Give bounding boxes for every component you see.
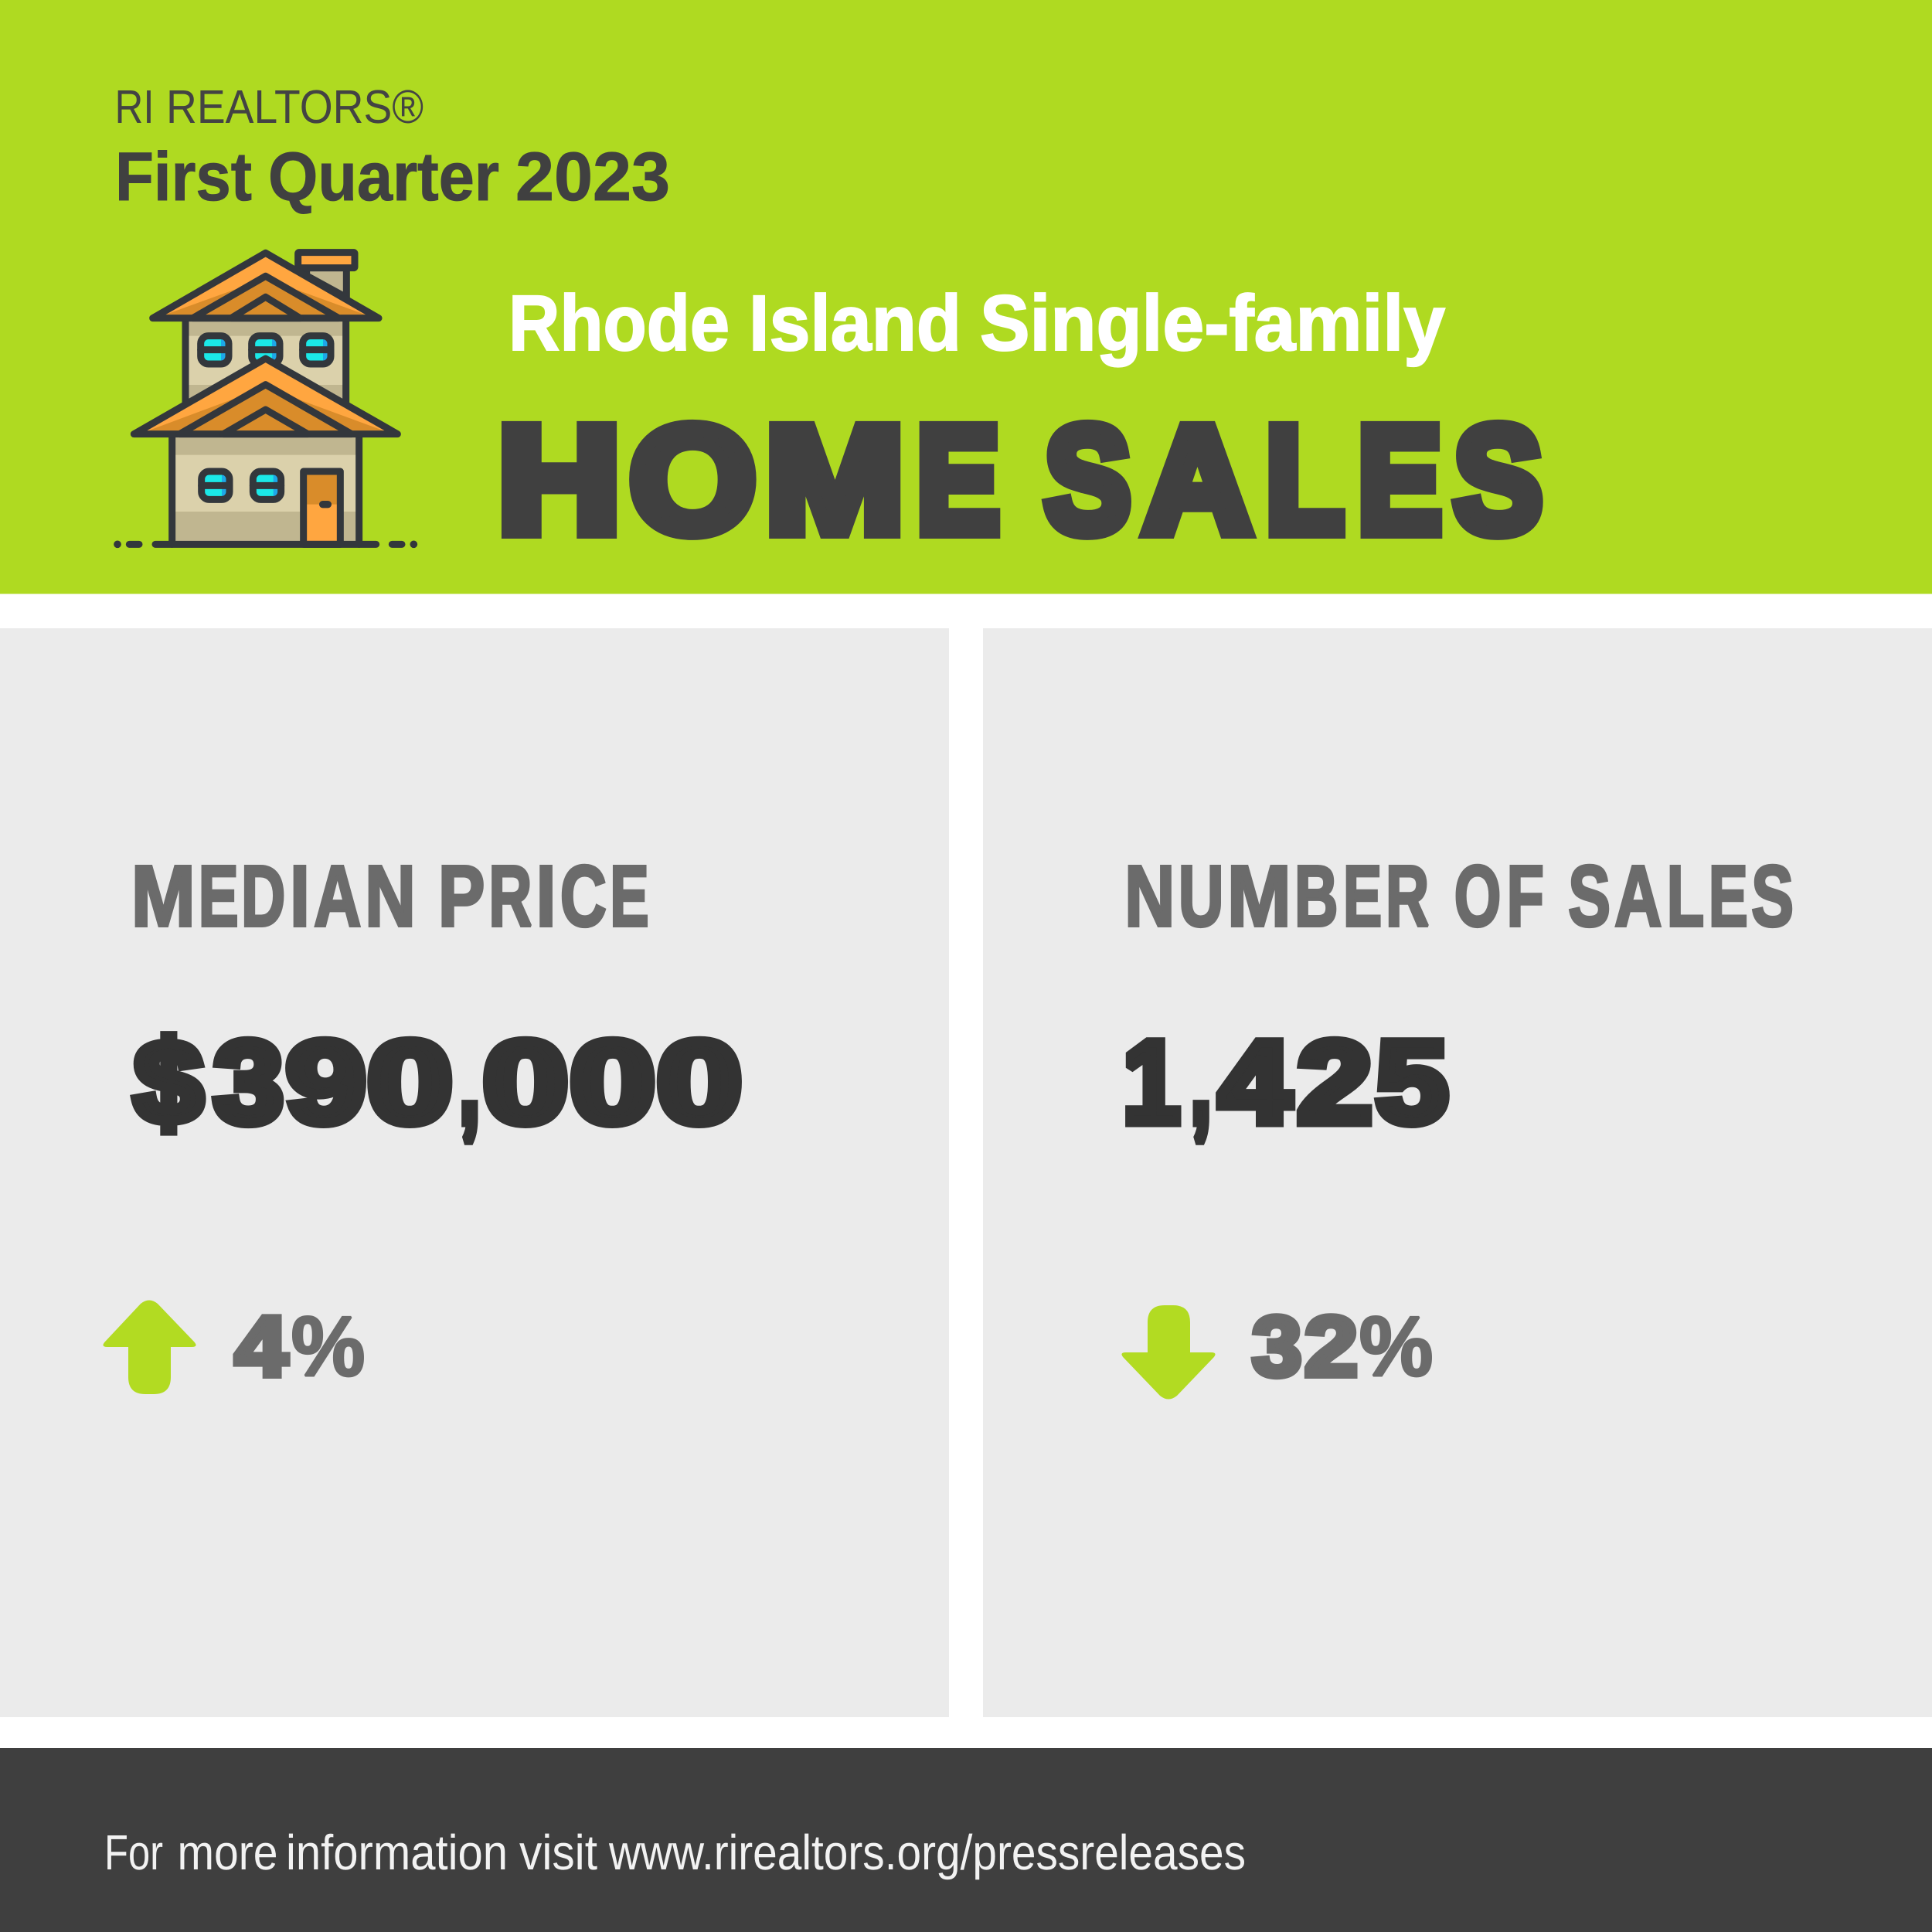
- title: HOME SALES: E: [1358, 396, 1441, 564]
- value: number of sales: 4: [1219, 1017, 1291, 1147]
- title: HOME SALES: S: [1045, 396, 1131, 564]
- footer text: For: [104, 1825, 163, 1880]
- value: number of sales: 2: [1298, 1017, 1372, 1147]
- label: number of sales: M: [1227, 848, 1291, 944]
- value: median price: 3: [214, 1017, 283, 1147]
- chimney: [298, 253, 355, 298]
- title: HOME SALES: H: [498, 396, 621, 564]
- label: number of sales: S: [1568, 848, 1611, 944]
- upper storey walls: [185, 318, 346, 406]
- label: median price: A: [314, 848, 361, 944]
- label: median price: C: [560, 848, 607, 944]
- label: number of sales: A: [1614, 848, 1662, 944]
- label: number of sales: R: [1386, 848, 1429, 944]
- label: number of sales: S: [1751, 848, 1794, 944]
- value: median price: 0: [657, 1017, 742, 1147]
- label: median price: N: [365, 848, 416, 944]
- label: number of sales: N: [1124, 848, 1175, 944]
- title: HOME SALES: M: [766, 396, 904, 564]
- heading: First Quarter 2023: Quarter: [268, 138, 499, 215]
- label: number of sales: U: [1179, 848, 1224, 944]
- heading: First Quarter 2023: 2023: [515, 138, 670, 215]
- value: median price: 0: [368, 1017, 452, 1147]
- lower windows: [202, 471, 281, 499]
- eyebrow: RI REALTORS: RI: [114, 80, 155, 133]
- lower roof: [134, 359, 397, 434]
- value: median price: ,: [460, 1017, 480, 1147]
- change: 32%: %: [1359, 1299, 1433, 1394]
- change: 32%: 2: [1304, 1299, 1358, 1394]
- label: number of sales: B: [1294, 848, 1338, 944]
- arrow: down: [1121, 1305, 1216, 1399]
- change: 32%: 3: [1252, 1299, 1301, 1394]
- ground line: [114, 540, 417, 548]
- label: number of sales: E: [1709, 848, 1748, 944]
- footer text: information: [286, 1825, 508, 1880]
- label: median price: M: [131, 848, 196, 944]
- panel: number of sales: [983, 628, 1932, 1717]
- label: median price: E: [199, 848, 239, 944]
- heading: First Quarter 2023: First: [115, 138, 252, 215]
- title: HOME SALES: L: [1266, 396, 1344, 564]
- value: median price: 9: [287, 1017, 366, 1147]
- label: number of sales: O: [1454, 848, 1501, 944]
- value: number of sales: 5: [1376, 1017, 1447, 1147]
- label: median price: D: [241, 848, 285, 944]
- title: HOME SALES: E: [917, 396, 999, 564]
- upper windows: [201, 336, 331, 364]
- label: number of sales: L: [1667, 848, 1704, 944]
- icon: house: [114, 253, 417, 548]
- panel: footer: [0, 1748, 1932, 1932]
- arrow: up: [103, 1300, 196, 1394]
- value: median price: 0: [484, 1017, 568, 1147]
- footer text: visit: [519, 1825, 597, 1880]
- label: median price: R: [488, 848, 532, 944]
- footer text: www.rirealtors.org/pressreleases: [608, 1825, 1246, 1880]
- panel: header: [0, 0, 1932, 594]
- title: HOME SALES: O: [630, 396, 756, 564]
- value: median price: 0: [570, 1017, 655, 1147]
- value: number of sales: ,: [1191, 1017, 1211, 1147]
- subtitle: Single-family: [980, 279, 1445, 367]
- subtitle: Rhode: [509, 279, 730, 367]
- label: number of sales: E: [1343, 848, 1382, 944]
- change: 4%: 4: [235, 1299, 287, 1394]
- upper roof: [153, 253, 379, 318]
- label: median price: I: [290, 848, 310, 944]
- eyebrow: RI REALTORS: REALTORS®: [166, 80, 423, 133]
- door: [304, 471, 340, 544]
- title: HOME SALES: A: [1144, 396, 1251, 564]
- lower storey walls: [172, 434, 359, 544]
- footer text: more: [178, 1825, 278, 1880]
- value: median price: $: [134, 1017, 202, 1147]
- change: 4%: %: [291, 1299, 365, 1394]
- value: number of sales: 1: [1124, 1017, 1179, 1147]
- label: median price: P: [438, 848, 485, 944]
- label: median price: I: [536, 848, 556, 944]
- label: median price: E: [610, 848, 649, 944]
- panel: median price: [0, 628, 949, 1717]
- title: HOME SALES: S: [1454, 396, 1543, 564]
- subtitle: Island: [749, 279, 961, 367]
- label: number of sales: F: [1507, 848, 1544, 944]
